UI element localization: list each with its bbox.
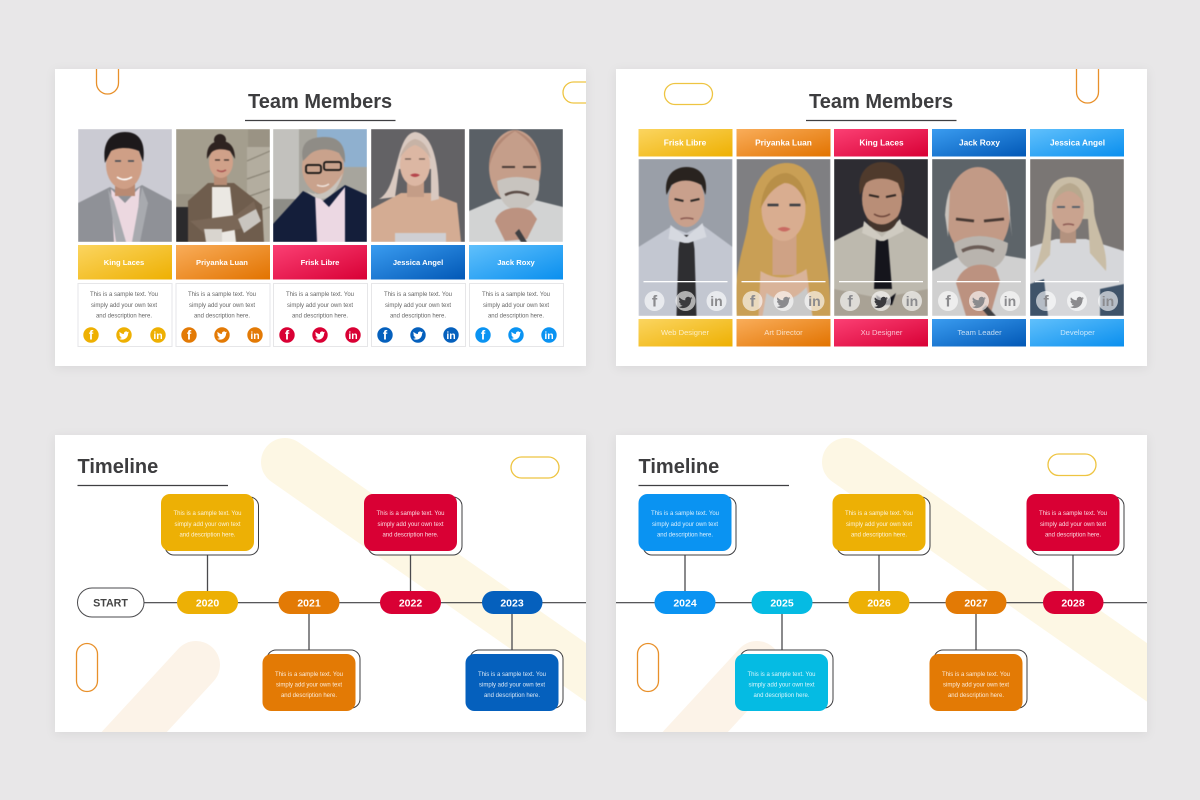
milestone 2028: simply add your own text: [1040, 522, 1106, 528]
card: Jack Roxy description and social icons: f: [481, 328, 486, 343]
name bar: King Laces: [834, 129, 928, 156]
milestone 2026: simply add your own text: [846, 522, 912, 528]
photo: Jack Roxy: [932, 159, 1026, 316]
card: Priyanka Luan description and social icons: in: [250, 330, 260, 342]
divider and social icons: [937, 281, 1021, 311]
divider and social icons: f: [945, 294, 951, 310]
decorative outline pills: [638, 454, 1096, 692]
photo: Jack Roxy: [469, 129, 563, 242]
card: King Laces description and social icons: simply add your own text: [91, 303, 157, 309]
milestone 2025: 2025: [770, 598, 794, 610]
card: Jack Roxy description and social icons: [470, 284, 564, 346]
divider and social icons: in: [1102, 293, 1114, 309]
card: King Laces description and social icons: and description here.: [96, 314, 152, 320]
card: Frisk Libre description and social icons: in: [348, 330, 358, 342]
name bar: Jack Roxy: Jack Roxy: [497, 258, 536, 267]
photo: Frisk Libre: [273, 129, 367, 242]
milestone 2025: simply add your own text: [748, 682, 815, 688]
card: King Laces description and social icons: [78, 284, 172, 346]
card: Priyanka Luan description and social icons: f: [187, 328, 192, 343]
milestone 2028: This is a sample text. You: [1039, 511, 1107, 517]
name bar: Jessica Angel: [371, 245, 465, 280]
divider and social icons: f: [652, 294, 658, 310]
milestone 2027: This is a sample text. You: [942, 672, 1010, 678]
milestone 2027: and description here.: [948, 693, 1004, 699]
name bar: King Laces: King Laces: [104, 258, 144, 267]
milestone 2020: 2020: [196, 598, 219, 610]
milestone 2028: 2028: [1061, 598, 1085, 610]
role bar: Team Leader: Team Leader: [957, 328, 1002, 337]
card: King Laces description and social icons: f: [89, 328, 94, 343]
photo: Priyanka Luan: [736, 159, 830, 316]
timeline axis: [616, 602, 1147, 604]
role bar: Xu Designer: Xu Designer: [861, 328, 903, 337]
heading: Team Members: Team Members: [248, 91, 392, 113]
panel: timeline 2024 to 2028: [616, 435, 1147, 734]
card: Jack Roxy description and social icons: This is a sample text. You: [482, 292, 550, 298]
photo: King Laces: [78, 129, 172, 242]
milestone 2023: This is a sample text. You: [478, 672, 546, 678]
milestone 2025: [735, 591, 833, 711]
milestone 2023: and description here.: [484, 693, 540, 699]
card: Frisk Libre description and social icons: [274, 284, 368, 346]
divider and social icons: in: [710, 293, 723, 309]
milestone 2022: simply add your own text: [377, 522, 444, 528]
card: Frisk Libre description and social icons: simply add your own text: [287, 303, 353, 309]
milestone 2021: and description here.: [281, 693, 337, 699]
card: Frisk Libre description and social icons: and description here.: [292, 314, 348, 320]
milestone 2022: and description here.: [382, 532, 439, 538]
name bar: Priyanka Luan: Priyanka Luan: [755, 137, 812, 147]
heading: Timeline: Timeline: [78, 456, 158, 478]
photo: Jessica Angel: [1030, 159, 1124, 316]
milestone 2022: This is a sample text. You: [376, 511, 445, 517]
role bar: Developer: Developer: [1060, 328, 1095, 337]
milestone 2023: simply add your own text: [479, 682, 545, 688]
milestone 2028: [1026, 494, 1124, 614]
heading: Timeline: Timeline: [638, 456, 719, 478]
name bar: Jack Roxy: [932, 129, 1026, 156]
milestone 2028: and description here.: [1045, 532, 1101, 538]
milestone 2026: 2026: [867, 598, 891, 610]
name bar: Jack Roxy: [469, 245, 563, 280]
panel: timeline 2020 to 2023: [55, 435, 586, 734]
card: Jessica Angel description and social icons: f: [383, 328, 388, 343]
milestone 2024: and description here.: [657, 532, 713, 538]
card: Jack Roxy description and social icons: in: [544, 330, 554, 342]
panel: team members with names on top: [616, 49, 1147, 366]
name bar: Jack Roxy: Jack Roxy: [959, 137, 1000, 147]
milestone 2024: [638, 494, 736, 614]
photo: Frisk Libre: [638, 159, 732, 316]
milestone 2026: [832, 494, 930, 614]
name bar: Frisk Libre: Frisk Libre: [301, 258, 339, 267]
milestone 2020: [161, 494, 258, 614]
milestone 2025: This is a sample text. You: [747, 672, 816, 678]
divider and social icons: in: [808, 293, 821, 309]
role bar: Web Designer: Web Designer: [661, 328, 709, 337]
card: Frisk Libre description and social icons: f: [285, 328, 290, 343]
milestone 2027: [930, 591, 1027, 711]
start pill: START: [93, 598, 128, 610]
divider and social icons: f: [750, 294, 756, 310]
role bar: Team Leader: [932, 319, 1026, 346]
decorative background stripes: [663, 438, 1147, 732]
milestone 2022: [364, 494, 462, 614]
decorative background stripes: [102, 438, 586, 732]
milestone 2024: simply add your own text: [652, 522, 718, 528]
photo: Jessica Angel: [371, 129, 465, 242]
divider and social icons: [644, 281, 728, 311]
panel: team members with photos on top: [55, 69, 586, 368]
card: Priyanka Luan description and social icons: [176, 284, 270, 346]
milestone 2021: 2021: [297, 598, 321, 610]
start pill: [78, 588, 144, 617]
milestone 2027: simply add your own text: [943, 682, 1009, 688]
divider and social icons: [839, 281, 923, 311]
milestone 2026: This is a sample text. You: [845, 511, 913, 517]
card: Priyanka Luan description and social icons: and description here.: [194, 314, 250, 320]
name bar: Jessica Angel: Jessica Angel: [1050, 137, 1105, 147]
milestone 2023: [466, 591, 563, 711]
role bar: Web Designer: [638, 319, 732, 346]
heading: Team Members: Team Members: [809, 91, 953, 113]
name bar: King Laces: [78, 245, 172, 280]
milestone 2024: This is a sample text. You: [651, 511, 719, 517]
milestone 2021: simply add your own text: [276, 682, 342, 688]
name bar: Priyanka Luan: Priyanka Luan: [196, 258, 248, 267]
milestone 2027: 2027: [964, 598, 988, 610]
card: King Laces description and social icons: in: [153, 330, 163, 342]
divider and social icons: [1035, 281, 1119, 311]
card: Jessica Angel description and social icons: in: [446, 330, 456, 342]
divider and social icons: f: [1043, 294, 1049, 310]
card: King Laces description and social icons: This is a sample text. You: [90, 292, 158, 298]
decorative outline pills: [96, 69, 586, 104]
milestone 2021: [262, 591, 360, 711]
milestone 2024: 2024: [673, 598, 697, 610]
milestone 2026: and description here.: [851, 532, 907, 538]
name bar: Jessica Angel: Jessica Angel: [393, 258, 443, 267]
decorative outline pills: [76, 457, 559, 692]
milestone 2020: simply add your own text: [174, 522, 241, 528]
photo: King Laces: [834, 159, 928, 316]
role bar: Xu Designer: [834, 319, 928, 346]
card: Priyanka Luan description and social icons: This is a sample text. You: [188, 292, 256, 298]
divider and social icons: f: [847, 294, 853, 310]
timeline axis: [144, 602, 586, 604]
decorative outline pills: [664, 69, 1100, 106]
milestone 2025: and description here.: [753, 693, 810, 699]
name bar: King Laces: King Laces: [859, 137, 904, 147]
milestone 2020: This is a sample text. You: [173, 511, 242, 517]
card: Jessica Angel description and social icons: [372, 284, 466, 346]
role bar: Art Director: [736, 319, 830, 346]
milestone 2021: This is a sample text. You: [275, 672, 343, 678]
milestone 2023: 2023: [500, 598, 524, 610]
name bar: Frisk Libre: Frisk Libre: [664, 137, 707, 147]
card: Frisk Libre description and social icons: This is a sample text. You: [286, 292, 354, 298]
card: Jessica Angel description and social icons: simply add your own text: [385, 303, 451, 309]
card: Jack Roxy description and social icons: and description here.: [488, 314, 544, 320]
name bar: Priyanka Luan: [176, 245, 270, 280]
name bar: Priyanka Luan: [736, 129, 830, 156]
photo: Priyanka Luan: [176, 129, 270, 242]
card: Jessica Angel description and social icons: This is a sample text. You: [384, 292, 452, 298]
card: Jessica Angel description and social icons: and description here.: [390, 314, 446, 320]
card: Priyanka Luan description and social icons: simply add your own text: [189, 303, 255, 309]
milestone 2020: and description here.: [179, 532, 236, 538]
milestone 2022: 2022: [399, 598, 422, 610]
name bar: Frisk Libre: [273, 245, 367, 280]
divider and social icons: [742, 281, 826, 311]
role bar: Developer: [1030, 319, 1124, 346]
card: Jack Roxy description and social icons: simply add your own text: [483, 303, 549, 309]
role bar: Art Director: Art Director: [764, 328, 803, 337]
name bar: Jessica Angel: [1030, 129, 1124, 156]
name bar: Frisk Libre: [638, 129, 732, 156]
divider and social icons: in: [1004, 293, 1016, 309]
divider and social icons: in: [906, 293, 918, 309]
